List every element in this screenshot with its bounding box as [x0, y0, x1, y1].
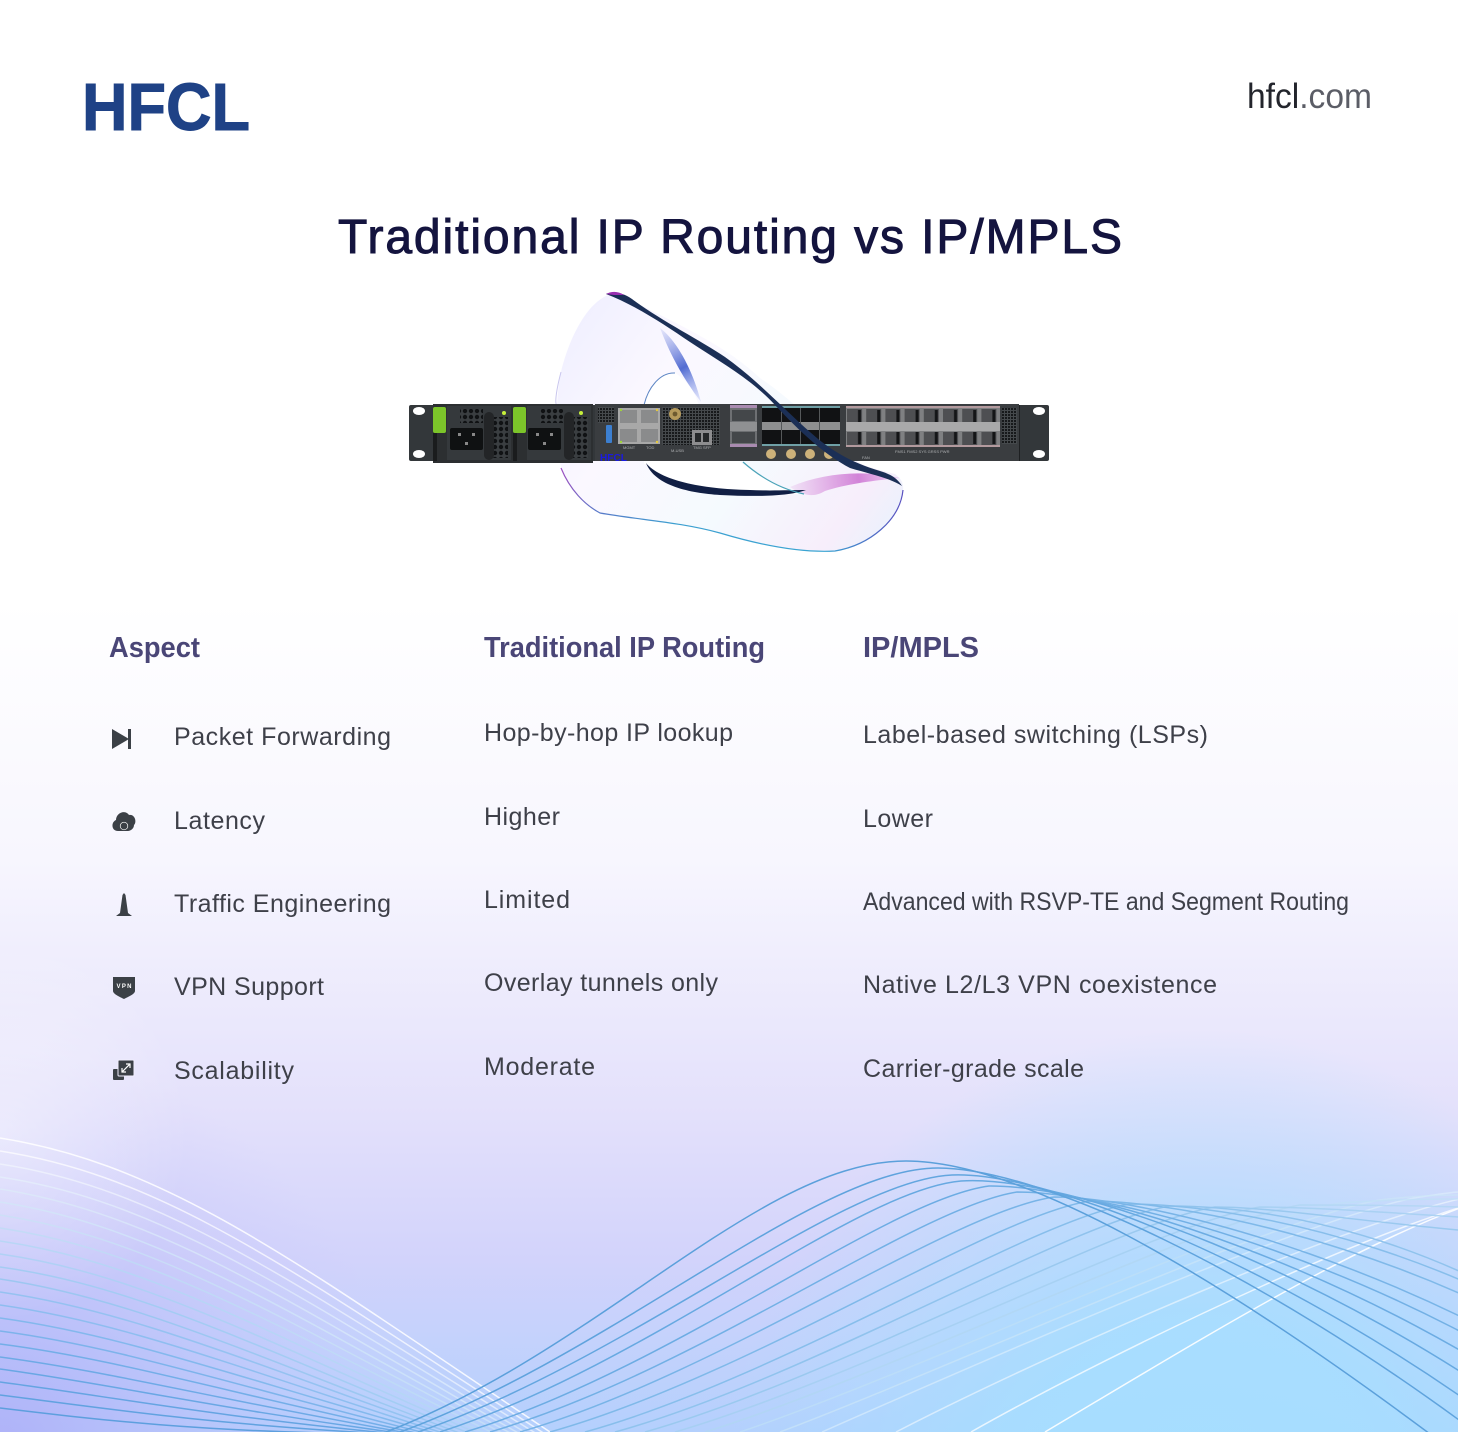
table header — [109, 632, 979, 664]
icon: vpn shield: VPN — [116, 984, 132, 990]
icon: traffic cone — [116, 893, 132, 916]
management ports: HFCL — [600, 452, 628, 464]
row: latency: Latency — [174, 807, 266, 835]
row: vpn support — [113, 969, 1217, 1001]
management ports: M-USB — [671, 448, 684, 453]
table header: Aspect — [109, 632, 200, 664]
SFP port block — [846, 406, 1017, 460]
wave lines: right family — [386, 1161, 1458, 1432]
row: vpn support: Overlay tunnels only — [484, 969, 718, 997]
ribbon shape — [556, 293, 903, 551]
row: traffic engineering — [116, 886, 1349, 918]
row: latency: Lower — [863, 805, 933, 833]
row: scalability: Moderate — [484, 1053, 595, 1081]
icon: vpn shield — [113, 977, 135, 999]
router chassis — [409, 404, 1049, 463]
logo: HFCL: HFCL — [82, 70, 250, 145]
row: scalability: Carrier-grade scale — [863, 1055, 1084, 1083]
row: traffic engineering: Limited — [484, 886, 570, 914]
row: latency — [112, 803, 933, 835]
wave lines: left family — [0, 1138, 553, 1432]
management ports: TOD — [646, 445, 654, 450]
management ports: MGMT — [623, 445, 636, 450]
row: traffic engineering: Advanced with RSVP-TE and Segment Routing — [863, 888, 1349, 916]
row: packet forwarding: Label-based switching (LSPs) — [863, 721, 1208, 749]
icon: skip forward — [112, 729, 131, 749]
row: traffic engineering: Traffic Engineering — [174, 890, 391, 918]
row: packet forwarding — [112, 719, 1208, 751]
management ports: TMG SFP — [693, 445, 711, 450]
power supply 1 — [433, 406, 511, 461]
row: vpn support: VPN Support — [174, 973, 324, 1001]
coax connectors — [766, 449, 834, 459]
icon: resize squares — [113, 1060, 134, 1080]
icon: cloud — [112, 812, 135, 831]
row: packet forwarding: Packet Forwarding — [174, 723, 391, 751]
row: latency: Higher — [484, 803, 560, 831]
table header: IP/MPLS — [863, 632, 979, 664]
row: scalability: Scalability — [174, 1057, 294, 1085]
row: packet forwarding: Hop-by-hop IP lookup — [484, 719, 733, 747]
QSFP ports — [730, 405, 757, 447]
SFP port block: FMS1 FMS2 SYS GRSS PWR — [895, 449, 950, 454]
website: hfcl.com: hfcl.com — [1247, 77, 1372, 116]
SFP cages — [762, 406, 840, 446]
SFP port block: FAN — [862, 455, 870, 460]
ribbon dark band over router — [606, 292, 902, 496]
row: scalability — [113, 1053, 1084, 1085]
title: Traditional IP Routing vs IP/MPLS — [338, 211, 1122, 264]
table header: Traditional IP Routing — [484, 632, 765, 664]
row: vpn support: Native L2/L3 VPN coexistence — [863, 971, 1217, 999]
management ports — [598, 407, 720, 464]
product image: router with ribbon — [409, 292, 1049, 551]
power supply 2 — [513, 406, 591, 461]
